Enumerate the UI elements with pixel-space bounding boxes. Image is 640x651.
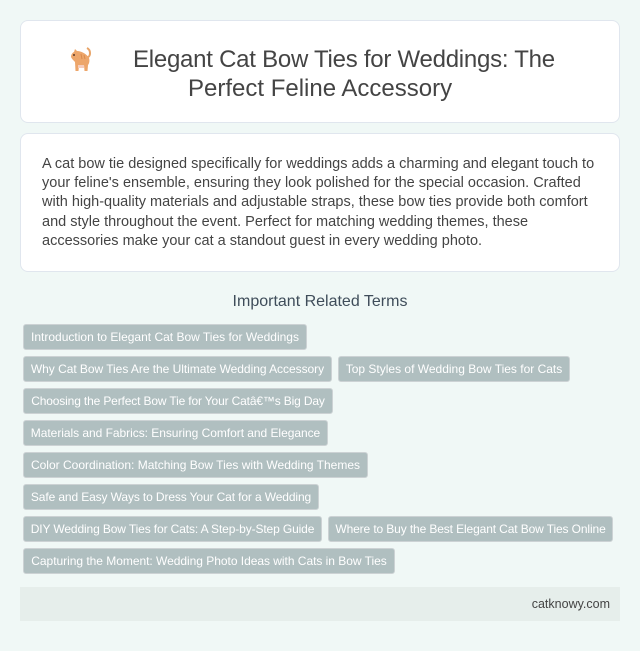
text: description paragraph	[42, 156, 594, 249]
tag	[328, 516, 613, 542]
panel: title card	[20, 20, 620, 123]
text: description paragraph: with high-quality materials and adjustable straps, these bow ties provide both comfort	[42, 194, 588, 210]
tag	[23, 356, 332, 382]
tag: Color Coordination: Matching Bow Ties with Wedding Themes	[31, 458, 360, 472]
tag	[23, 420, 328, 446]
text: description paragraph: and style throughout the event. Perfect for matching wedding themes, these	[42, 214, 528, 230]
tag	[23, 452, 368, 478]
tag	[23, 388, 333, 414]
tags list	[23, 324, 613, 574]
icon: cat	[71, 47, 91, 71]
tag: Choosing the Perfect Bow Tie for Your Catâ€™s Big Day	[31, 394, 325, 408]
panel: description card	[20, 133, 620, 272]
tag	[23, 516, 322, 542]
tag: Where to Buy the Best Elegant Cat Bow Ties Online	[335, 522, 606, 536]
tag: Capturing the Moment: Wedding Photo Ideas with Cats in Bow Ties	[31, 554, 387, 568]
tag	[23, 484, 319, 510]
tag: Safe and Easy Ways to Dress Your Cat for a Wedding	[31, 490, 311, 504]
tag: Materials and Fabrics: Ensuring Comfort and Elegance	[31, 426, 320, 440]
tag: Why Cat Bow Ties Are the Ultimate Wedding Accessory	[31, 362, 324, 376]
heading: important related terms: Important Related Terms	[233, 293, 407, 310]
text: description paragraph: accessories make your cat a standout guest in every wedding photo.	[42, 233, 482, 249]
tag: Top Styles of Wedding Bow Ties for Cats	[346, 362, 562, 376]
text: description paragraph: A cat bow tie designed specifically for weddings adds a charming and elegant touch to	[42, 156, 594, 172]
tag: DIY Wedding Bow Ties for Cats: A Step-by-Step Guide	[31, 522, 314, 536]
tag	[338, 356, 570, 382]
tag	[23, 324, 307, 350]
tag: Introduction to Elegant Cat Bow Ties for Weddings	[31, 330, 299, 344]
footer text: catknowy.com	[532, 597, 610, 611]
heading: line 1: Elegant Cat Bow Ties for Weddings: The	[133, 46, 555, 73]
tag	[23, 548, 395, 574]
footer bar	[20, 587, 620, 621]
text: description paragraph: your feline's ensemble, ensuring they look polished for the special occasion. Crafted	[42, 175, 581, 191]
heading: line 2: Perfect Feline Accessory	[188, 75, 452, 102]
